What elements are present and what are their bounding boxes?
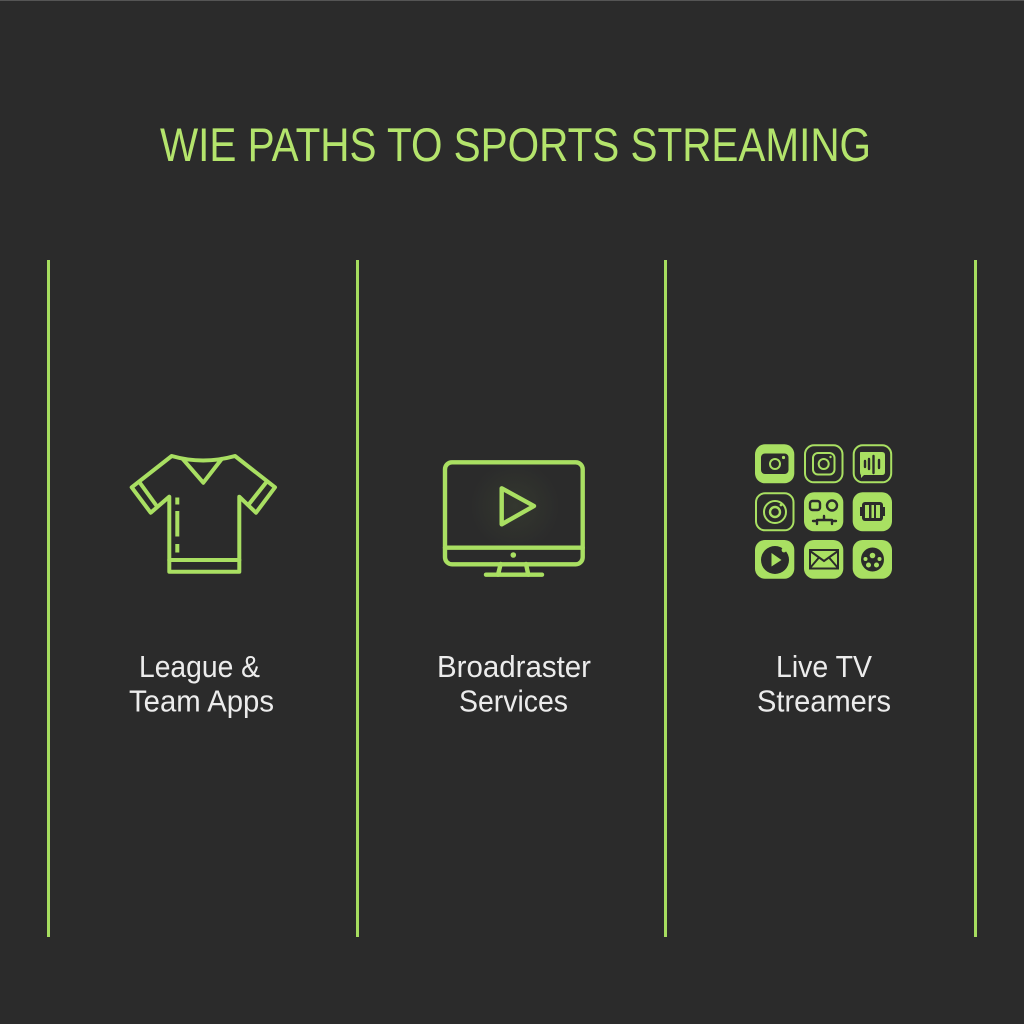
- app tile: camera: [755, 444, 794, 483]
- label: league and team apps: Team Apps: [129, 684, 274, 718]
- label: broadcaster services: Services: [459, 684, 568, 718]
- app tile: mail: [804, 540, 843, 579]
- column divider lines: [47, 260, 977, 937]
- icon: jersey: [132, 456, 275, 572]
- app tile: video play: [755, 540, 794, 579]
- app tile: outlined photo app: [805, 445, 842, 482]
- app tile: soccer ball: [853, 540, 892, 579]
- app tile: audio chat: [854, 445, 891, 482]
- label: live tv streamers: Streamers: [757, 684, 891, 718]
- label: live tv streamers: Live TV: [776, 649, 872, 684]
- title: WIE PATHS TO SPORTS STREAMING: [160, 118, 871, 171]
- app tile: outlined lens: [756, 493, 794, 530]
- label: broadcaster services: Broadraster: [437, 649, 591, 684]
- app tile: robot face: [804, 492, 843, 531]
- label: league and team apps: League &: [139, 649, 260, 684]
- icon: monitor with play button: [445, 462, 583, 575]
- icon grid: streaming apps: [755, 444, 892, 579]
- app tile: scoreboard: [853, 492, 892, 531]
